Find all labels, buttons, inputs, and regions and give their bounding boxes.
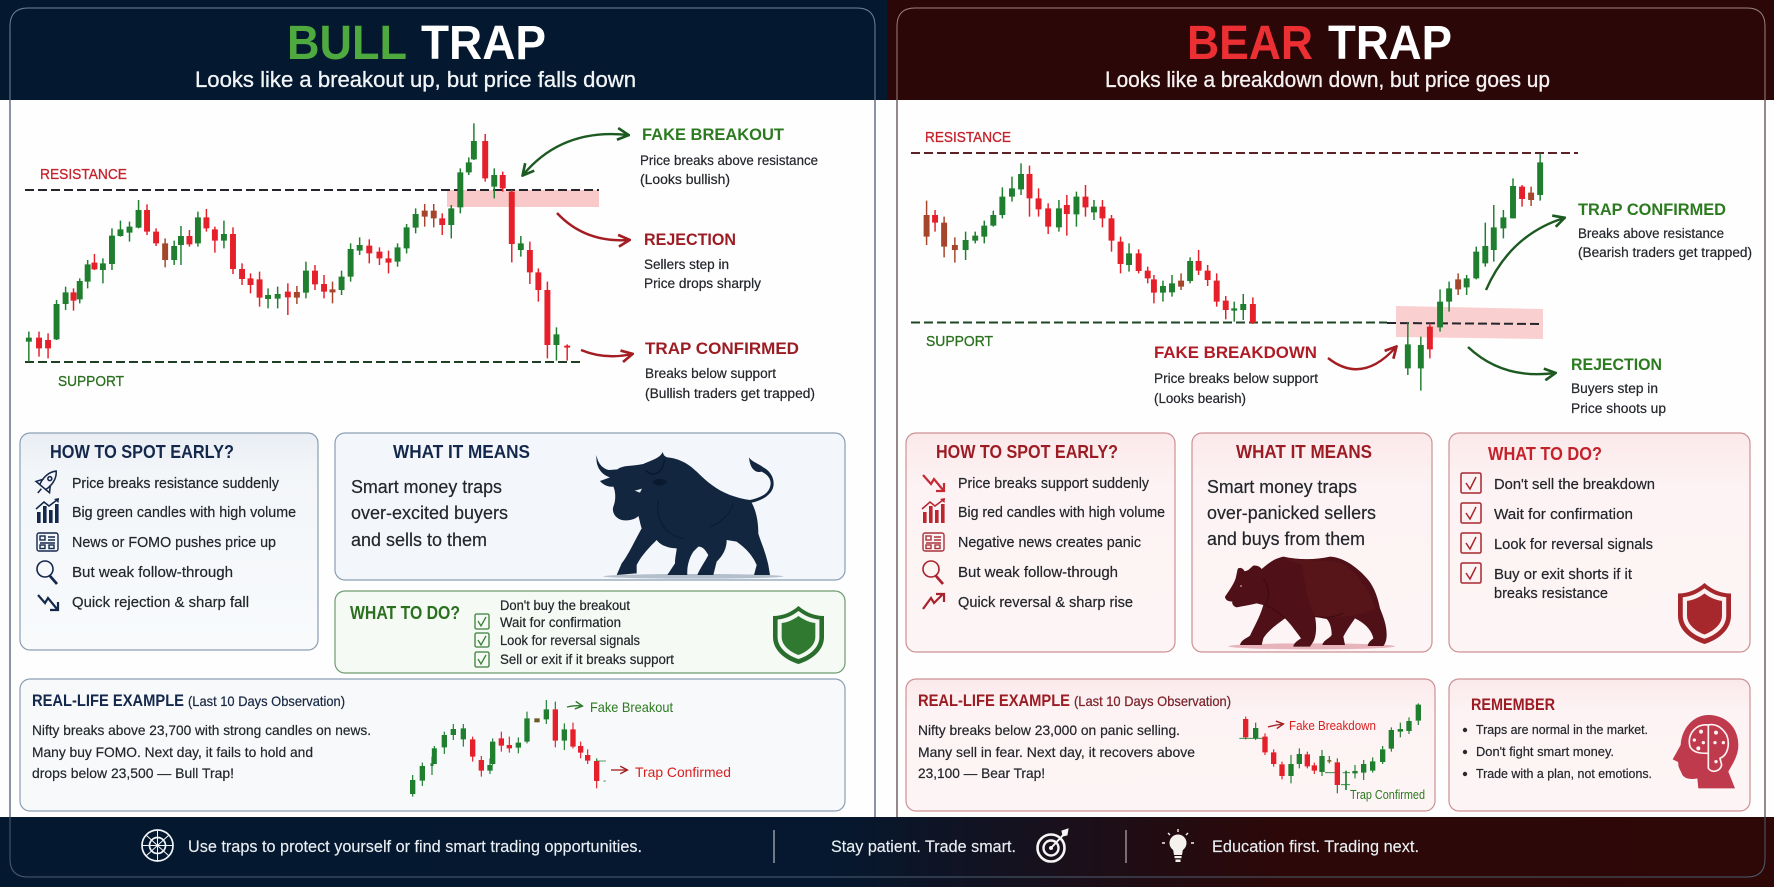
list: remember points: Don't fight smart money. (1476, 744, 1614, 759)
arrow: mini fake breakout (567, 706, 582, 707)
label: support: SUPPORT (58, 373, 124, 390)
panel: bull trap (0, 0, 887, 817)
mini chart: bull example (413, 699, 731, 797)
label: support: SUPPORT (926, 333, 993, 350)
divider (773, 830, 775, 863)
text: example (918, 722, 1195, 781)
subtitle: bear trap: Looks like a breakdown down, but price goes up (1105, 67, 1550, 92)
callout: rejection: Price drops sharply (644, 276, 761, 291)
panel: what it means (bear) (1192, 433, 1432, 652)
illustration: bull (596, 452, 783, 579)
text: meaning: over-panicked sellers (1207, 502, 1376, 523)
panel: what to do (bear) (1449, 433, 1750, 652)
text: meaning (1207, 476, 1376, 549)
item: weak follow-through: But weak follow-through (958, 565, 1118, 581)
callout: fake breakout: (Looks bullish) (640, 172, 730, 187)
callout: fake breakdown: (Looks bearish) (1154, 391, 1246, 406)
footer banner (0, 817, 1774, 887)
icon: brain in head (1673, 715, 1738, 788)
checklist: Look for reversal signals (500, 633, 640, 648)
heading: how to spot early: HOW TO SPOT EARLY? (50, 442, 234, 462)
title: bull trap (287, 17, 546, 70)
header: bull trap (0, 0, 887, 100)
callout: trap confirmed: TRAP CONFIRMED (645, 339, 799, 358)
mini chart: bear example (1239, 703, 1425, 802)
panel: bull price chart (25, 123, 818, 401)
list: remember points: Traps are normal in the market. (1476, 722, 1648, 737)
heading: what to do: WHAT TO DO? (1488, 444, 1602, 464)
icon: light bulb (1162, 829, 1194, 862)
icon: falling arrow (923, 475, 944, 491)
text: education first: Education first. Trading next. (1212, 838, 1419, 856)
checklist (475, 598, 674, 667)
arrow: rejection (557, 213, 629, 240)
panel: bear price chart (911, 129, 1752, 416)
icon: rising arrow (923, 594, 944, 609)
subtitle: bull trap: Looks like a breakout up, but price falls down (195, 67, 636, 92)
callout: rejection: Price shoots up (1571, 401, 1666, 416)
support line (911, 322, 1387, 324)
label: fake breakdown: Fake Breakdown (1289, 718, 1376, 733)
title: bull trap: TRAP (421, 17, 546, 70)
arrow: trap confirmed (1486, 218, 1564, 290)
callout: fake breakout: Price breaks above resistance (640, 153, 818, 168)
text: example: 23,100 — Bear Trap! (918, 765, 1045, 781)
candlesticks: bear chart (927, 153, 1540, 391)
arrow: rejection (1468, 347, 1555, 374)
item: price breaks resistance: Price breaks resistance suddenly (72, 476, 280, 492)
resistance line (25, 189, 599, 191)
heading: how to spot early: HOW TO SPOT EARLY? (936, 442, 1118, 462)
icon: news (37, 533, 58, 551)
item: negative news: Negative news creates panic (958, 535, 1141, 551)
heading: real-life example (918, 692, 1231, 710)
item: news or fomo: News or FOMO pushes price up (72, 535, 276, 551)
item: quick rejection: Quick rejection & sharp fall (72, 595, 249, 611)
callout: rejection: REJECTION (644, 230, 736, 249)
icon: magnifier (37, 561, 57, 584)
callout: trap confirmed (645, 339, 815, 401)
illustration: bear (1225, 557, 1395, 649)
list: remember points: Trade with a plan, not emotions. (1476, 766, 1652, 781)
icon: rocket (31, 465, 63, 499)
checklist: breaks resistance (1494, 586, 1608, 602)
header: bear trap (887, 0, 1774, 100)
text: meaning (351, 476, 508, 550)
title: bull trap: BULL (287, 17, 407, 70)
panel: real-life example (bear) (906, 679, 1435, 811)
checklist (1461, 473, 1655, 602)
callout: trap confirmed: (Bearish traders get trapped) (1578, 245, 1752, 260)
rejection zone (447, 190, 599, 207)
callout: trap confirmed: TRAP CONFIRMED (1578, 200, 1726, 219)
panel: what to do (bull) (335, 591, 845, 673)
label: trap confirmed: Trap Confirmed (635, 764, 731, 780)
heading: what it means: WHAT IT MEANS (1236, 442, 1372, 462)
text: example: Nifty breaks above 23,700 with strong candles on news. (32, 722, 371, 738)
divider (1125, 830, 1127, 863)
panel: real-life example (bull) (20, 679, 845, 811)
panel: how to spot early (bull) (20, 433, 318, 650)
text: example: Many sell in fear. Next day, it recovers above (918, 744, 1195, 760)
label: fake breakout: Fake Breakout (590, 699, 673, 715)
heading: real-life example: (Last 10 Days Observation) (188, 693, 345, 709)
rejection zone (1396, 306, 1543, 339)
heading: real-life example: REAL-LIFE EXAMPLE (918, 692, 1070, 710)
item: big green candles: Big green candles with high volume (72, 505, 296, 521)
item: quick reversal: Quick reversal & sharp rise (958, 595, 1133, 611)
checklist: Wait for confirmation (500, 615, 621, 630)
arrow: fake breakdown (1328, 347, 1396, 369)
icon: rising bars (36, 498, 59, 523)
heading: real-life example: REAL-LIFE EXAMPLE (32, 692, 184, 710)
text: stay patient: Stay patient. Trade smart. (831, 838, 1016, 856)
arrow: mini fake breakdown (1268, 724, 1283, 727)
heading: real-life example (32, 692, 345, 710)
callout: rejection: REJECTION (1571, 355, 1662, 374)
callout: trap confirmed: Breaks below support (645, 366, 776, 381)
checklist: Buy or exit shorts if it (1494, 567, 1632, 583)
heading: what to do: WHAT TO DO? (350, 603, 460, 623)
text: example: Nifty breaks below 23,000 on panic selling. (918, 722, 1180, 738)
label: resistance: RESISTANCE (925, 129, 1011, 146)
callout: fake breakdown: Price breaks below support (1154, 371, 1318, 386)
callout: rejection (644, 230, 761, 291)
text: meaning: and buys from them (1207, 528, 1365, 549)
checklist: Don't buy the breakout (500, 598, 630, 613)
icon: falling arrow (38, 595, 58, 610)
text: meaning: Smart money traps (351, 476, 502, 497)
checklist: Look for reversal signals (1494, 537, 1653, 553)
callout: fake breakout: FAKE BREAKOUT (642, 125, 785, 144)
callout: trap confirmed (1578, 200, 1752, 260)
panel: what it means (bull) (335, 433, 845, 580)
icon: magnifier (923, 561, 943, 584)
text: meaning: Smart money traps (1207, 476, 1357, 497)
title: bear trap (1187, 17, 1452, 70)
heading: remember: REMEMBER (1471, 696, 1555, 714)
panel: remember (1449, 679, 1750, 811)
label: trap confirmed: Trap Confirmed (1350, 788, 1425, 802)
title: bear trap: TRAP (1328, 17, 1452, 70)
callout: fake breakout (640, 125, 818, 187)
callout: rejection: Sellers step in (644, 257, 729, 272)
icon: globe target (142, 830, 173, 861)
icon: bars (922, 498, 945, 523)
checklist: Don't sell the breakdown (1494, 477, 1655, 493)
callout: rejection (1571, 355, 1666, 416)
checklist: Wait for confirmation (1494, 507, 1633, 523)
icon: news (923, 533, 944, 551)
panel: bear trap (887, 0, 1774, 817)
item: price breaks support: Price breaks support suddenly (958, 476, 1150, 492)
heading: real-life example: (Last 10 Days Observation) (1074, 693, 1231, 709)
text: meaning: over-excited buyers (351, 502, 508, 523)
text: example: Many buy FOMO. Next day, it fails to hold and (32, 744, 313, 760)
icon: red shield (1678, 583, 1731, 644)
callout: fake breakdown: FAKE BREAKDOWN (1154, 343, 1317, 362)
text: example: drops below 23,500 — Bull Trap! (32, 765, 234, 781)
support line (25, 361, 584, 363)
icon: green shield (773, 606, 824, 664)
list: remember points (1463, 722, 1652, 781)
arrow: mini trap confirmed (611, 769, 627, 771)
callout: fake breakdown (1154, 343, 1318, 406)
label: resistance: RESISTANCE (40, 166, 127, 183)
heading: what it means: WHAT IT MEANS (393, 442, 530, 462)
callout: trap confirmed: (Bullish traders get trapped) (645, 386, 815, 401)
text: use traps: Use traps to protect yourself or find smart trading opportunities. (188, 838, 642, 856)
title: bear trap: BEAR (1187, 17, 1313, 70)
item: big red candles: Big red candles with high volume (958, 505, 1165, 521)
candlesticks: bull chart (29, 123, 567, 362)
text: example (32, 722, 371, 781)
checklist: Sell or exit if it breaks support (500, 652, 674, 667)
item: weak follow-through: But weak follow-through (72, 565, 233, 581)
arrow: fake breakout (523, 134, 628, 175)
arrow: trap confirmed (581, 350, 632, 356)
callout: rejection: Buyers step in (1571, 381, 1658, 396)
resistance line (911, 152, 1578, 154)
text: meaning: and sells to them (351, 529, 487, 550)
callout: trap confirmed: Breaks above resistance (1578, 226, 1724, 241)
panel: how to spot early (bear) (906, 433, 1175, 652)
icon: target with arrow (1038, 829, 1068, 862)
